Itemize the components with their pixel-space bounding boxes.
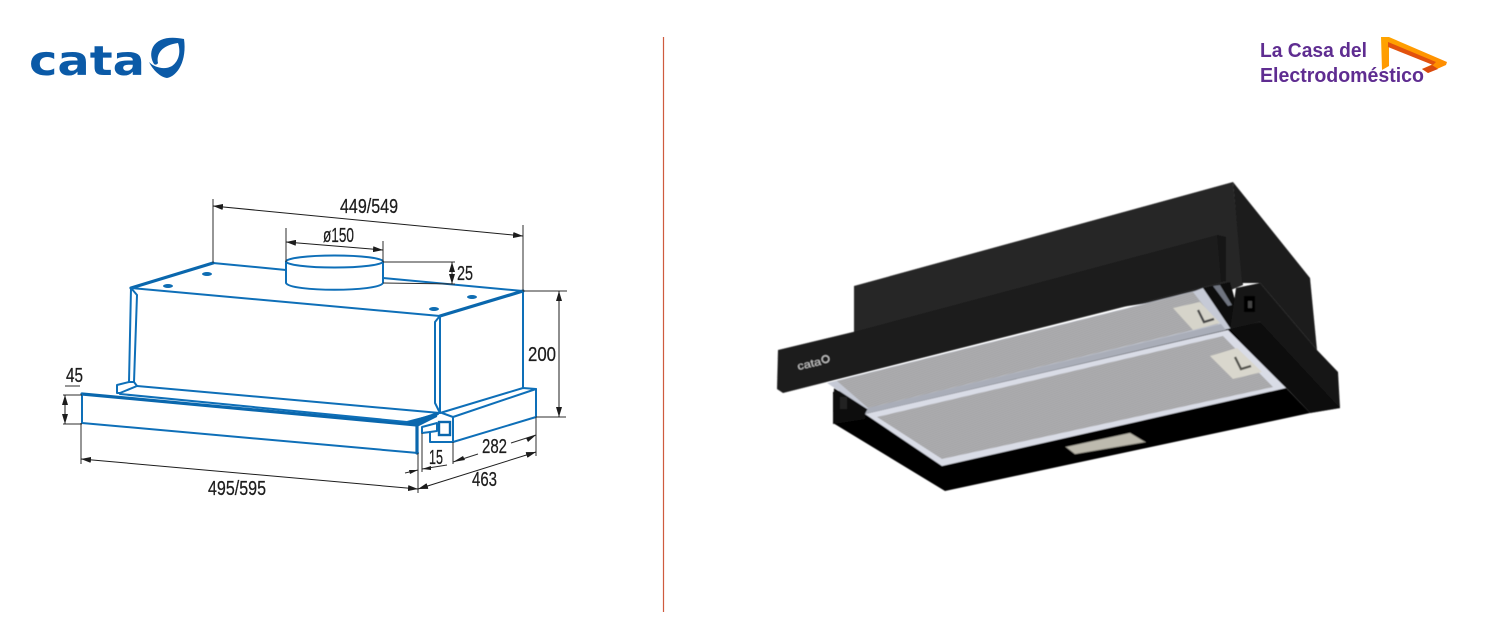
front fascia [777, 235, 1226, 393]
hood rear top panel [854, 182, 1243, 345]
right front block [1230, 322, 1340, 413]
extension lines [63, 199, 567, 493]
front filter frame [865, 330, 1286, 466]
dimension labels: 200 [528, 344, 556, 366]
dimension labels: 282 [482, 436, 507, 458]
front filter mesh [877, 336, 1273, 459]
duct [286, 256, 383, 290]
dimension lines [213, 206, 523, 236]
logo text: La Casa del [1260, 40, 1367, 62]
hood body outline [117, 263, 523, 413]
rear filter frame [827, 288, 1232, 409]
fascia brand mark: cata [796, 356, 822, 373]
frame bar shadow [865, 324, 1226, 414]
side box [422, 388, 536, 442]
left side bracket [833, 388, 867, 424]
hood side upper [1233, 182, 1317, 350]
logo swoosh [149, 38, 185, 78]
rear filter handle [1173, 302, 1220, 330]
logo text: Electrodoméstico [1260, 65, 1424, 87]
technical drawing [63, 196, 567, 500]
logo: cata [29, 37, 185, 85]
dimension labels: 15 [429, 447, 443, 469]
logo: La Casa del Electrodoméstico [1260, 37, 1447, 87]
dimension labels [66, 196, 556, 500]
fascia brand mark [796, 354, 831, 373]
dimension labels: 25 [457, 263, 473, 285]
light panel [1066, 433, 1145, 454]
dimension labels: 449/549 [340, 196, 398, 218]
interior highlight [1213, 285, 1232, 306]
logo triangle mark [1381, 37, 1447, 73]
dimension labels: ø150 [323, 225, 354, 247]
telescopic front panel [82, 394, 438, 453]
dimension labels: 495/595 [208, 478, 266, 500]
underside black [833, 320, 1310, 491]
logo wordmark: cata [29, 37, 145, 85]
dimension labels: 45 [66, 365, 83, 387]
rear filter mesh [837, 292, 1218, 408]
hood side lower [1260, 283, 1340, 413]
switch panel [1230, 283, 1260, 330]
dimension labels: 463 [472, 469, 497, 491]
product illustration: black telescopic hood [777, 182, 1340, 491]
fascia right edge [1217, 235, 1226, 282]
front filter handle [1210, 348, 1262, 379]
divider line [662, 37, 664, 612]
interior gap [1203, 282, 1240, 328]
